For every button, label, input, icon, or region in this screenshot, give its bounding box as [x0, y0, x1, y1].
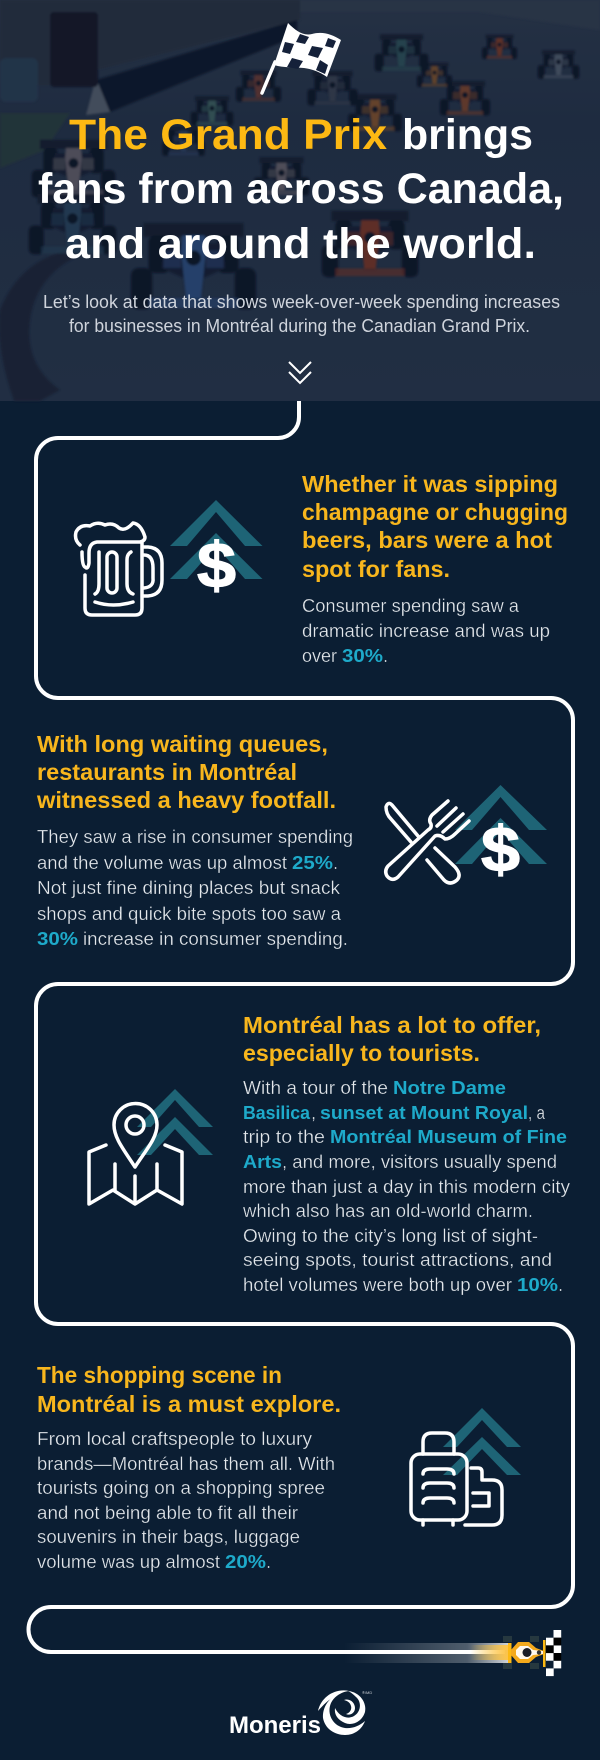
text: tourism: Arts: [243, 1151, 282, 1172]
panel: bars: [76, 471, 568, 666]
panel: shopping: [37, 1362, 521, 1572]
text: tourism: trip to the: [243, 1126, 325, 1147]
text: restaurants: Not just fine dining places but snack: [37, 877, 341, 898]
icon: chequered flag: [262, 23, 341, 93]
hero photo background: race cars on the track: [0, 0, 600, 401]
text: tourism: With a tour of the: [243, 1077, 388, 1098]
text: tourism: Montréal Museum of Fine: [330, 1126, 567, 1147]
heading: tourism: especially to tourists.: [243, 1040, 480, 1066]
subtitle: for businesses in Montréal during the Canadian Grand Prix.: [69, 316, 530, 336]
text: tourism: which also has an old-world charm.: [242, 1200, 533, 1221]
text: shopping: brands—Montréal has them all. With: [37, 1453, 335, 1474]
text: tourism: [242, 1077, 571, 1295]
heading: bars: champagne or chugging: [302, 499, 568, 525]
panel: tourism: [89, 1012, 571, 1295]
text: shopping: tourists going on a shopping spree: [37, 1477, 325, 1498]
text: shopping: volume was up almost: [37, 1551, 220, 1572]
text: restaurants: They saw a rise in consumer spending: [37, 826, 353, 847]
text: restaurants: 25%: [292, 852, 333, 873]
subtitle: [43, 292, 560, 336]
text: restaurants: [37, 826, 353, 949]
heading: bars: Whether it was sipping: [302, 471, 558, 497]
text: bars: Consumer spending saw a: [302, 595, 520, 616]
heading: tourism: Montréal has a lot to offer,: [243, 1012, 541, 1038]
finish: race car with speed trail and chequered line: [344, 1630, 561, 1676]
text: shopping: [37, 1428, 335, 1572]
text: restaurants: .: [333, 852, 338, 873]
title: [38, 111, 564, 268]
text: tourism: seeing spots, tourist attractions, and: [243, 1249, 552, 1270]
text: tourism: , and more, visitors usually spend: [282, 1151, 557, 1172]
logo: Moneris: [229, 1690, 372, 1739]
text: tourism: sunset at Mount Royal: [320, 1102, 528, 1123]
heading: restaurants: [36, 731, 336, 813]
title: and around the world.: [65, 220, 536, 268]
text: restaurants: 30%: [37, 928, 78, 949]
heading: bars: beers, bars were a hot: [302, 527, 552, 553]
heading: bars: [302, 471, 568, 582]
text: restaurants: increase in consumer spending.: [83, 928, 348, 949]
text: tourism: Basilica: [243, 1102, 311, 1123]
text: tourism: ,: [311, 1102, 316, 1123]
text: bars: 30%: [342, 645, 383, 666]
heading: shopping: Montréal is a must explore.: [37, 1391, 341, 1417]
text: tourism: Owing to the city’s long list of sight-: [243, 1225, 538, 1246]
text: shopping: and not being able to fit all their: [37, 1502, 298, 1523]
text: tourism: Notre Dame: [393, 1077, 506, 1098]
logo: Moneris: ®/MD: [362, 1690, 372, 1695]
title: brings: [402, 111, 533, 159]
icon: fork and knife with rising dollar: [386, 785, 547, 885]
text: shopping: From local craftspeople to luxury: [37, 1428, 313, 1449]
icon: double down chevrons: [289, 362, 311, 383]
text: bars: [302, 595, 550, 666]
text: tourism: , a: [528, 1102, 546, 1123]
text: bars: .: [383, 645, 388, 666]
icon: beer mug with rising dollar: [76, 500, 262, 615]
text: shopping: souvenirs in their bags, luggage: [37, 1526, 300, 1547]
text: restaurants: shops and quick bite spots too saw a: [37, 903, 342, 924]
icon: map pin with rising chevrons: [89, 1089, 213, 1204]
heading: restaurants: With long waiting queues,: [37, 731, 328, 757]
title: fans from across Canada,: [38, 165, 564, 213]
logo: Moneris: Moneris: [229, 1712, 321, 1739]
icon: fork and knife with rising dollar: $: [481, 813, 520, 885]
text: tourism: 10%: [517, 1274, 558, 1295]
text: restaurants: and the volume was up almost: [37, 852, 287, 873]
title: The Grand Prix: [69, 111, 387, 159]
heading: bars: spot for fans.: [302, 556, 450, 582]
heading: restaurants: witnessed a heavy footfall.: [36, 787, 336, 813]
heading: shopping: The shopping scene in: [37, 1362, 282, 1388]
heading: restaurants: restaurants in Montréal: [37, 759, 297, 785]
race track line: [28, 401, 573, 1652]
heading: shopping: [37, 1362, 341, 1417]
text: tourism: more than just a day in this modern city: [243, 1176, 571, 1197]
text: tourism: hotel volumes were both up over: [243, 1274, 512, 1295]
icon: luggage with rising chevrons: [411, 1408, 521, 1525]
panel: restaurants: [36, 731, 547, 949]
text: bars: over: [302, 645, 337, 666]
text: bars: dramatic increase and was up: [302, 620, 550, 641]
text: shopping: .: [266, 1551, 271, 1572]
subtitle: Let’s look at data that shows week-over-week spending increases: [43, 292, 560, 312]
heading: tourism: [243, 1012, 541, 1066]
icon: beer mug with rising dollar: $: [197, 529, 236, 601]
text: tourism: .: [558, 1274, 563, 1295]
text: shopping: 20%: [225, 1551, 266, 1572]
